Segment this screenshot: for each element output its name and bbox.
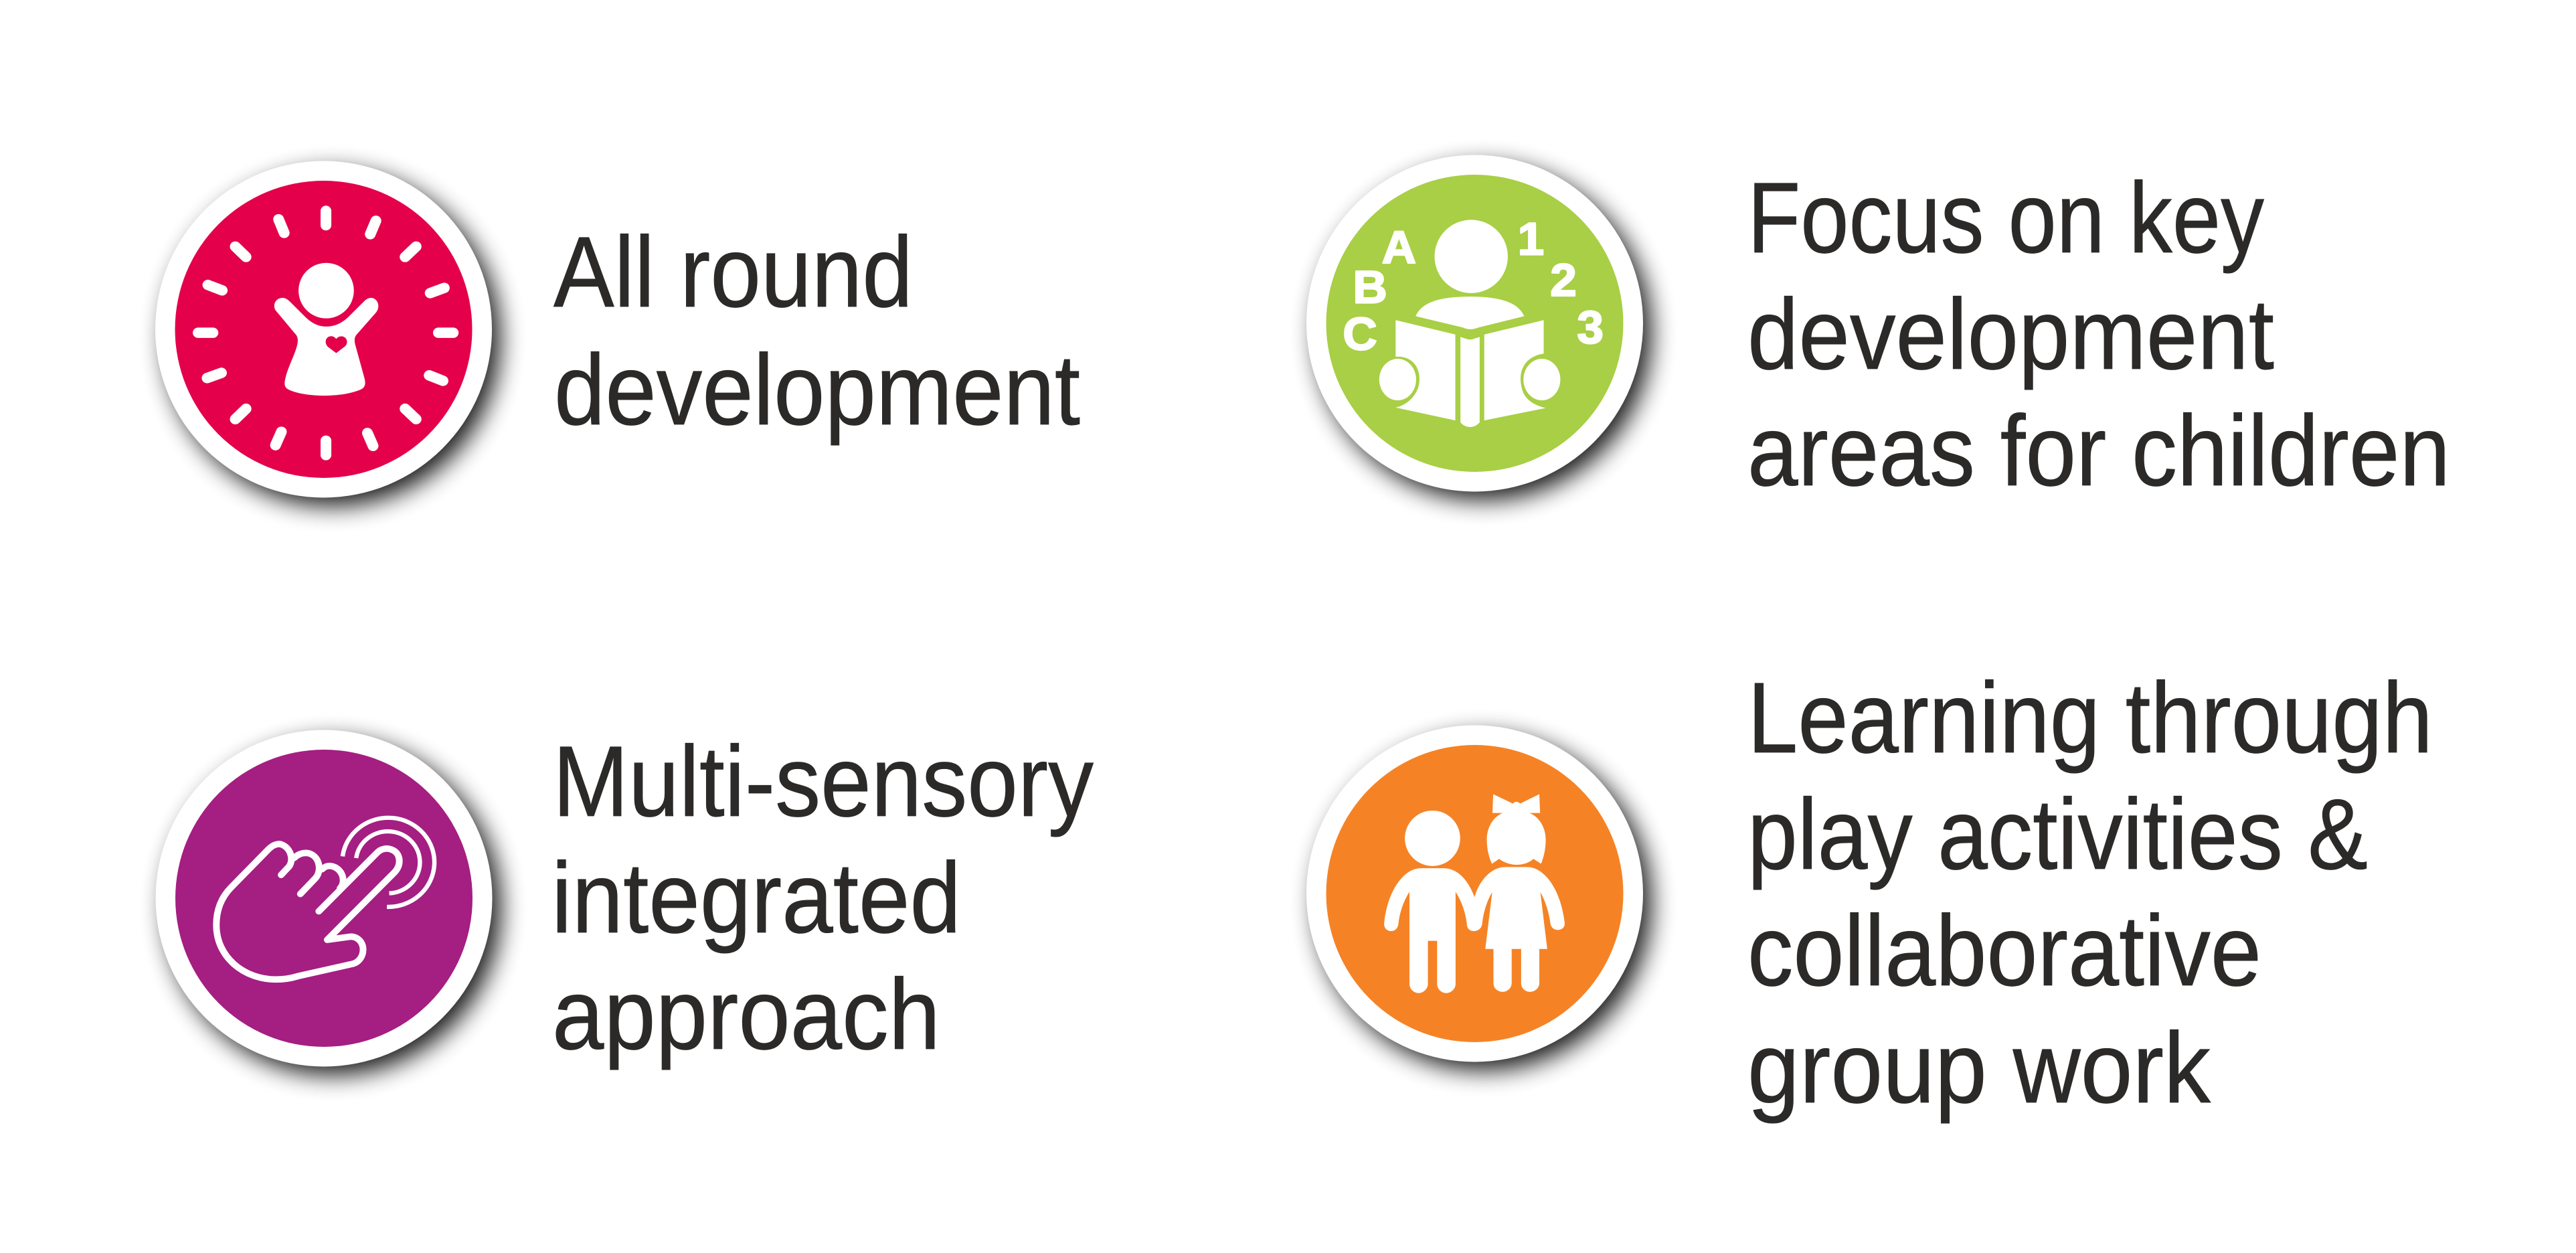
icon: child reading a book with letters and numbers: C	[1343, 309, 1377, 359]
icon: happy child with radiating ticks	[198, 211, 453, 455]
icon: boy and girl holding hands	[1384, 795, 1565, 993]
text: learning through play activities and collaborative group work: Learning through	[1747, 661, 2433, 774]
text: focus on key development areas for children: development	[1747, 278, 2274, 390]
text: learning through play activities and collaborative group work: collaborative	[1747, 894, 2261, 1007]
text: focus on key development areas for children: areas for children	[1747, 394, 2450, 507]
text: all round development: development	[554, 333, 1080, 446]
panel: multi-sensory integrated approach	[155, 725, 1094, 1075]
panel: learning through play	[1306, 661, 2433, 1124]
text: learning through play activities and collaborative group work: group work	[1747, 1011, 2211, 1124]
panel: focus on key development areas	[1306, 155, 2450, 507]
icon: child reading a book with letters and numbers: 1	[1518, 214, 1544, 264]
text: multi-sensory integrated approach: integrated	[551, 841, 961, 954]
text: learning through play activities and collaborative group work	[1747, 661, 2433, 1124]
text: focus on key development areas for children: Focus on key	[1747, 161, 2264, 274]
icon: child reading a book with letters and numbers	[1343, 214, 1604, 427]
icon: child reading a book with letters and numbers: 2	[1550, 254, 1577, 306]
icon: child reading a book with letters and numbers: 3	[1577, 301, 1604, 353]
badge: red circle with shadow	[155, 161, 500, 506]
text: learning through play activities and collaborative group work: play activities &	[1747, 778, 2368, 890]
badge: purple circle with shadow	[155, 730, 501, 1075]
icon: child reading a book with letters and numbers: B	[1353, 261, 1387, 313]
icon: pointing hand with touch ripples	[216, 818, 434, 979]
panel: all round development	[155, 161, 1080, 506]
text: multi-sensory integrated approach: approach	[552, 958, 940, 1070]
text: focus on key development areas for children	[1747, 161, 2450, 507]
icon: child reading a book with letters and numbers: A	[1382, 222, 1416, 273]
badge: green circle with shadow	[1306, 155, 1651, 500]
text: all round development: All round	[553, 216, 913, 328]
badge: orange circle with shadow	[1306, 726, 1651, 1070]
text: all round development	[553, 216, 1080, 446]
text: multi-sensory integrated approach: Multi-sensory	[553, 725, 1094, 837]
text: multi-sensory integrated approach	[551, 725, 1094, 1070]
